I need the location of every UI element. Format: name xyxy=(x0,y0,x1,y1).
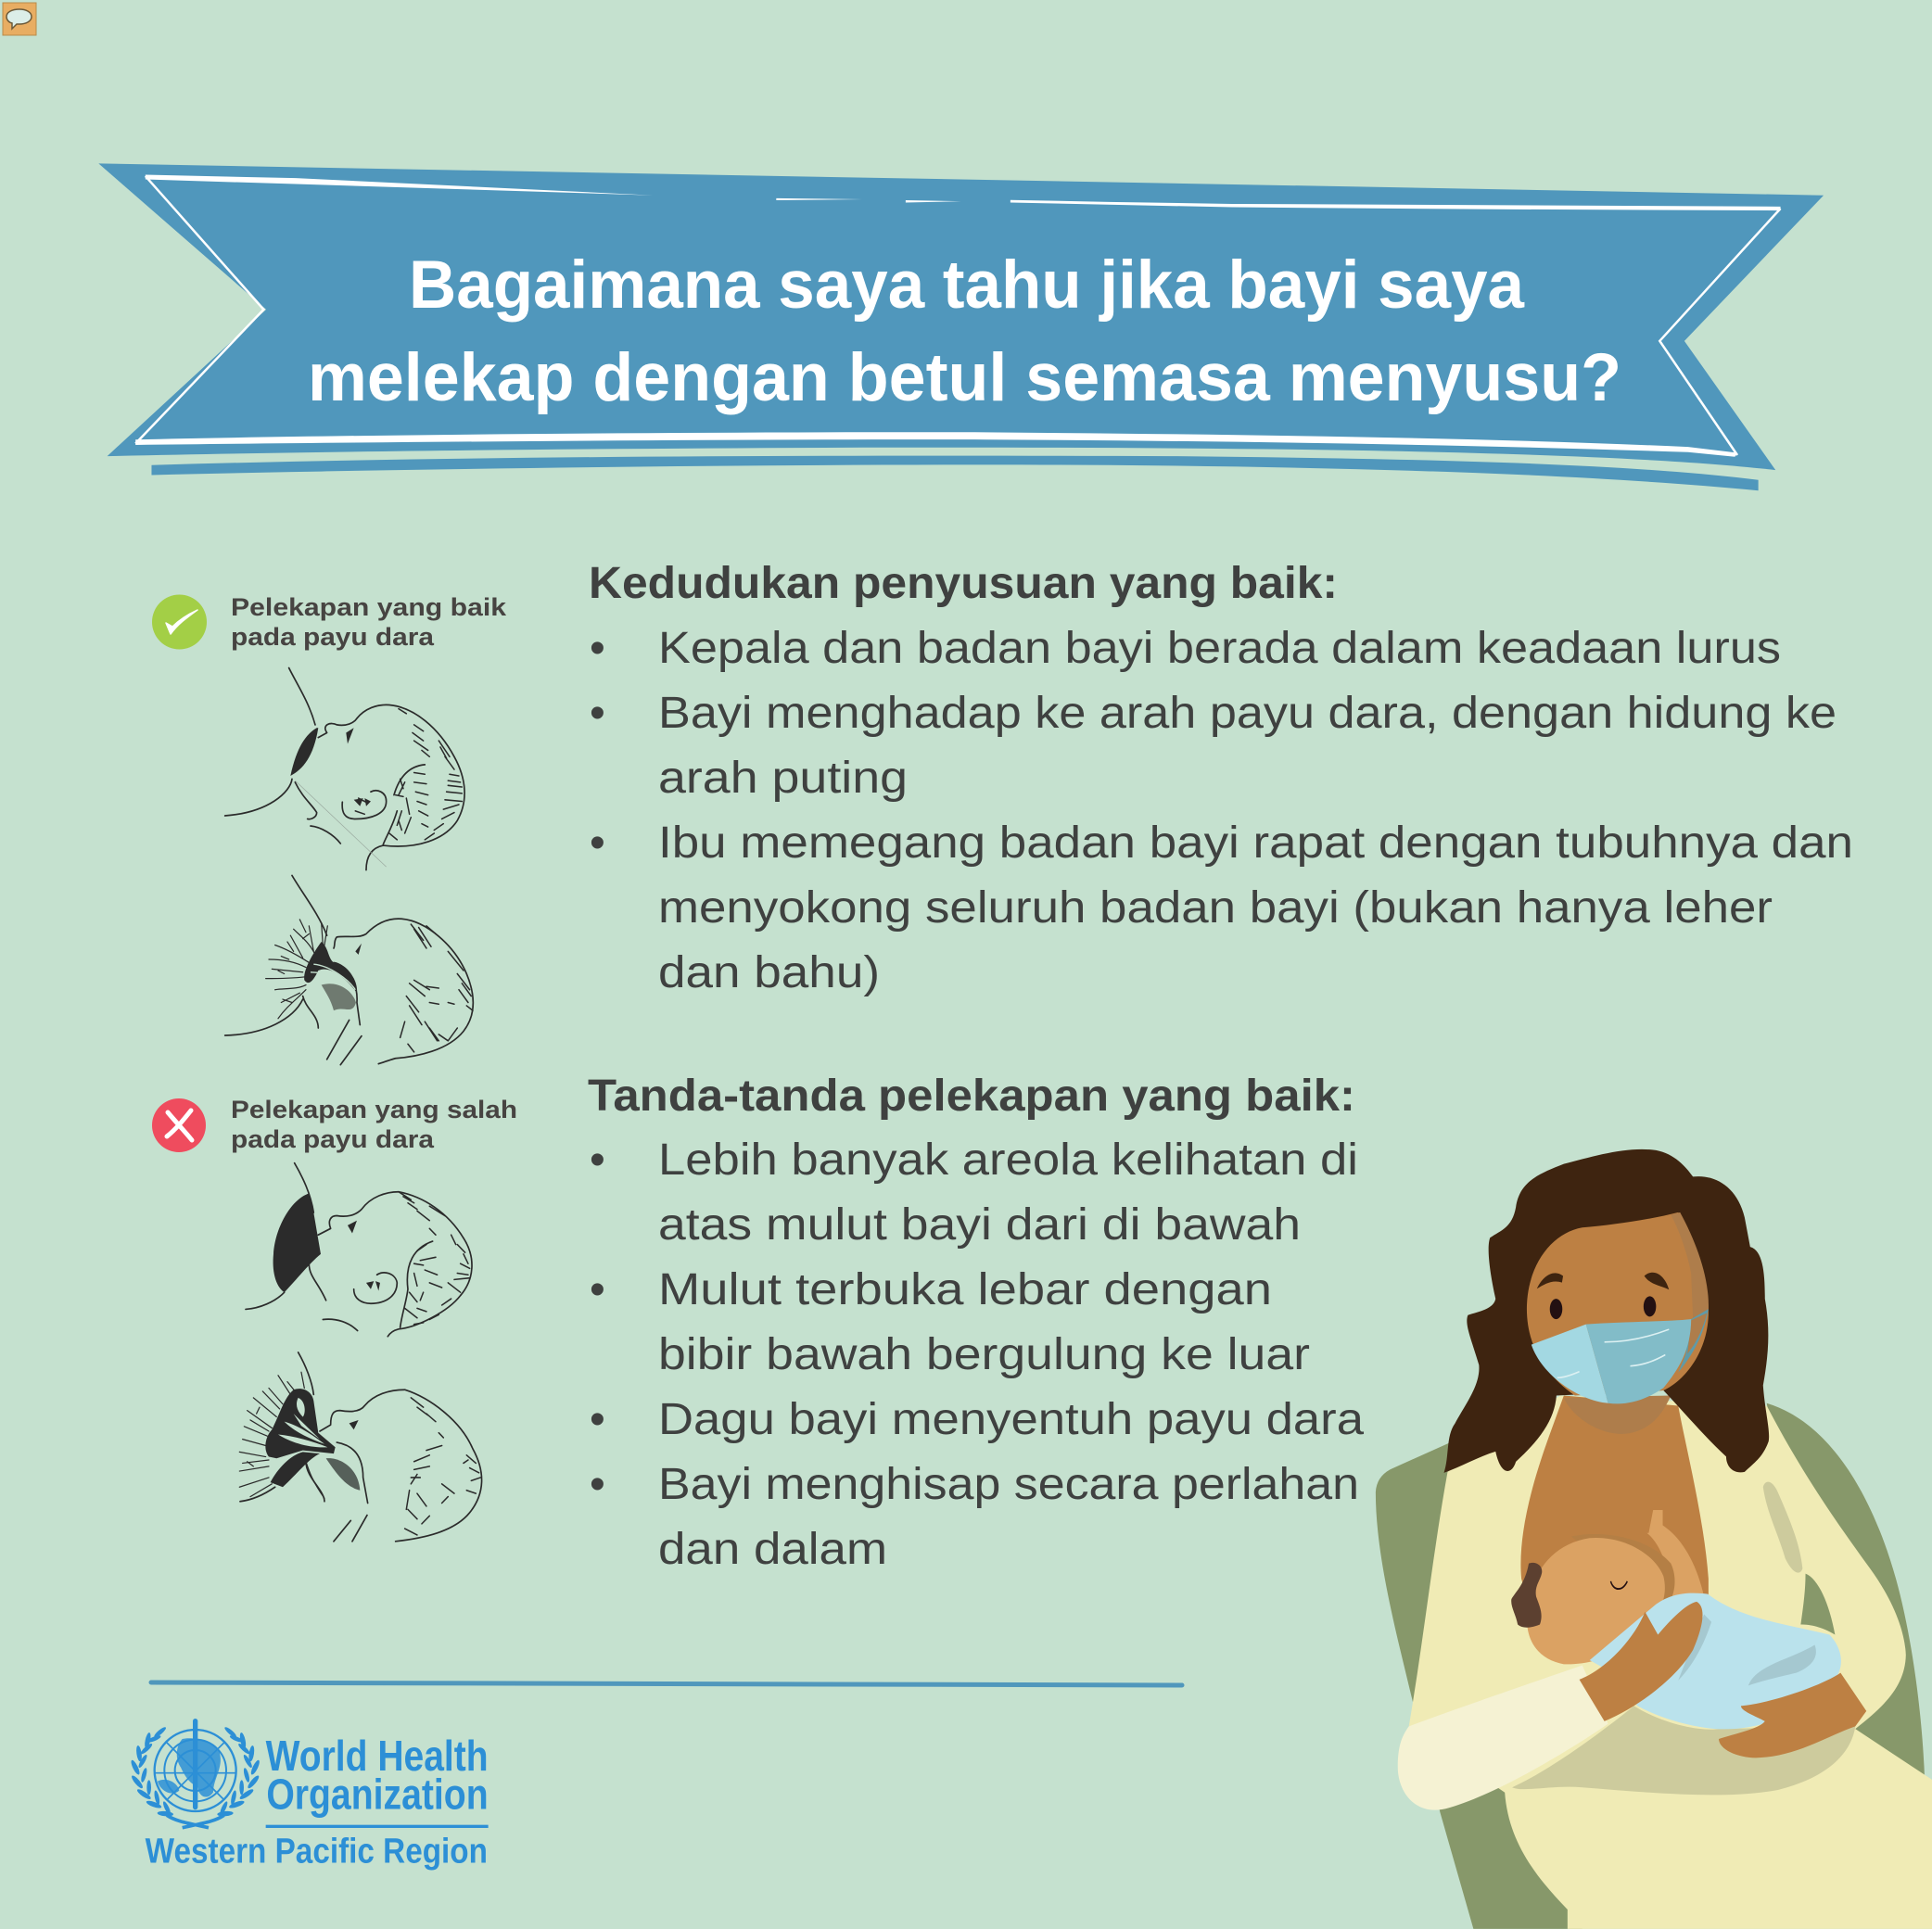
text block: good breastfeeding position: • xyxy=(590,819,605,868)
wordmark: Western Pacific Region xyxy=(146,1832,488,1871)
banner title text xyxy=(308,247,1621,415)
text block: good breastfeeding position: Bayi menghadap ke arah payu dara, dengan hidung ke xyxy=(658,689,1837,738)
banner title text: Bagaimana saya tahu jika bayi saya xyxy=(409,247,1525,323)
drawing: baby latched, inside view xyxy=(225,875,473,1065)
text block: good breastfeeding position: dan bahu) xyxy=(658,948,880,997)
text block: good breastfeeding position: menyokong seluruh badan bayi (bukan hanya leher xyxy=(658,883,1773,933)
wordmark xyxy=(146,1732,489,1871)
text block: signs of good latch: • xyxy=(590,1460,605,1509)
eyes and brows xyxy=(1537,1273,1669,1319)
torso xyxy=(1520,1395,1709,1640)
heading: good latch: pada payu dara xyxy=(231,623,435,651)
text block: signs of good latch: atas mulut bayi dari di bawah xyxy=(658,1200,1301,1250)
title banner xyxy=(98,163,1824,490)
emblem xyxy=(130,1719,261,1828)
text block: good breastfeeding position: • xyxy=(590,689,605,738)
armpit gap and sleeve crease xyxy=(1800,1574,1835,1635)
text block: signs of good latch: • xyxy=(590,1265,605,1314)
text block: signs of good latch: bibir bawah bergulung ke luar xyxy=(658,1330,1310,1379)
wordmark: World Health xyxy=(266,1732,489,1780)
text block: signs of good latch: Dagu bayi menyentuh payu dara xyxy=(658,1395,1364,1444)
text block: signs of good latch: • xyxy=(590,1395,605,1444)
armchair xyxy=(1376,1403,1925,1929)
cardigan and dress xyxy=(1409,1395,1932,1929)
text block: signs of good latch: Lebih banyak areola kelihatan di xyxy=(658,1136,1358,1185)
text block: signs of good latch: dan dalam xyxy=(658,1525,887,1574)
text block: signs of good latch: Tanda-tanda pelekapan yang baik: xyxy=(588,1072,1355,1121)
text block: signs of good latch xyxy=(588,1072,1364,1574)
panel: good latch xyxy=(152,593,507,1065)
banner ribbon shape xyxy=(98,163,1824,490)
text block: good breastfeeding position: Kedudukan penyusuan yang baik: xyxy=(589,559,1338,608)
icon: comment note xyxy=(3,3,36,35)
neck shadow xyxy=(1564,1395,1671,1434)
divider line xyxy=(151,1682,1182,1685)
text block: signs of good latch: Mulut terbuka lebar dengan xyxy=(658,1265,1272,1314)
drawing: poor latch, inside view xyxy=(239,1352,482,1542)
text block: good breastfeeding position: Kepala dan badan bayi berada dalam keadaan lurus xyxy=(658,624,1781,673)
face xyxy=(1527,1212,1709,1395)
panel: poor latch xyxy=(152,1096,517,1542)
heading: poor latch: Pelekapan yang salah xyxy=(231,1096,517,1123)
icon: green check xyxy=(152,595,207,649)
sleeve arm xyxy=(1398,1665,1608,1810)
heading: poor latch: pada payu dara xyxy=(231,1125,435,1153)
text block: good breastfeeding position: arah puting xyxy=(658,754,908,803)
heading: poor latch xyxy=(231,1096,517,1153)
drawing: poor latch, outside view xyxy=(246,1163,472,1337)
wordmark: Organization xyxy=(266,1770,489,1819)
text block: good breastfeeding position xyxy=(589,559,1853,997)
heading: good latch: Pelekapan yang baik xyxy=(231,593,507,621)
illustration: masked mother breastfeeding baby xyxy=(1376,1149,1932,1929)
text block: signs of good latch: • xyxy=(590,1136,605,1185)
drawing: baby latched, outside view xyxy=(225,668,464,870)
text block: good breastfeeding position: • xyxy=(590,624,605,673)
baby xyxy=(1511,1510,1841,1729)
text block: signs of good latch: Bayi menghisap secara perlahan xyxy=(658,1460,1359,1509)
heading: good latch xyxy=(231,593,507,651)
hair xyxy=(1444,1149,1769,1473)
face mask xyxy=(1532,1309,1709,1403)
lap shadow xyxy=(1512,1706,1855,1795)
banner title text: melekap dengan betul semasa menyusu? xyxy=(308,340,1621,415)
icon: red cross xyxy=(152,1098,206,1152)
text block: good breastfeeding position: Ibu memegang badan bayi rapat dengan tubuhnya dan xyxy=(658,819,1853,868)
logo: WHO Western Pacific Region xyxy=(130,1719,489,1871)
mother's hands xyxy=(1580,1602,1866,1758)
